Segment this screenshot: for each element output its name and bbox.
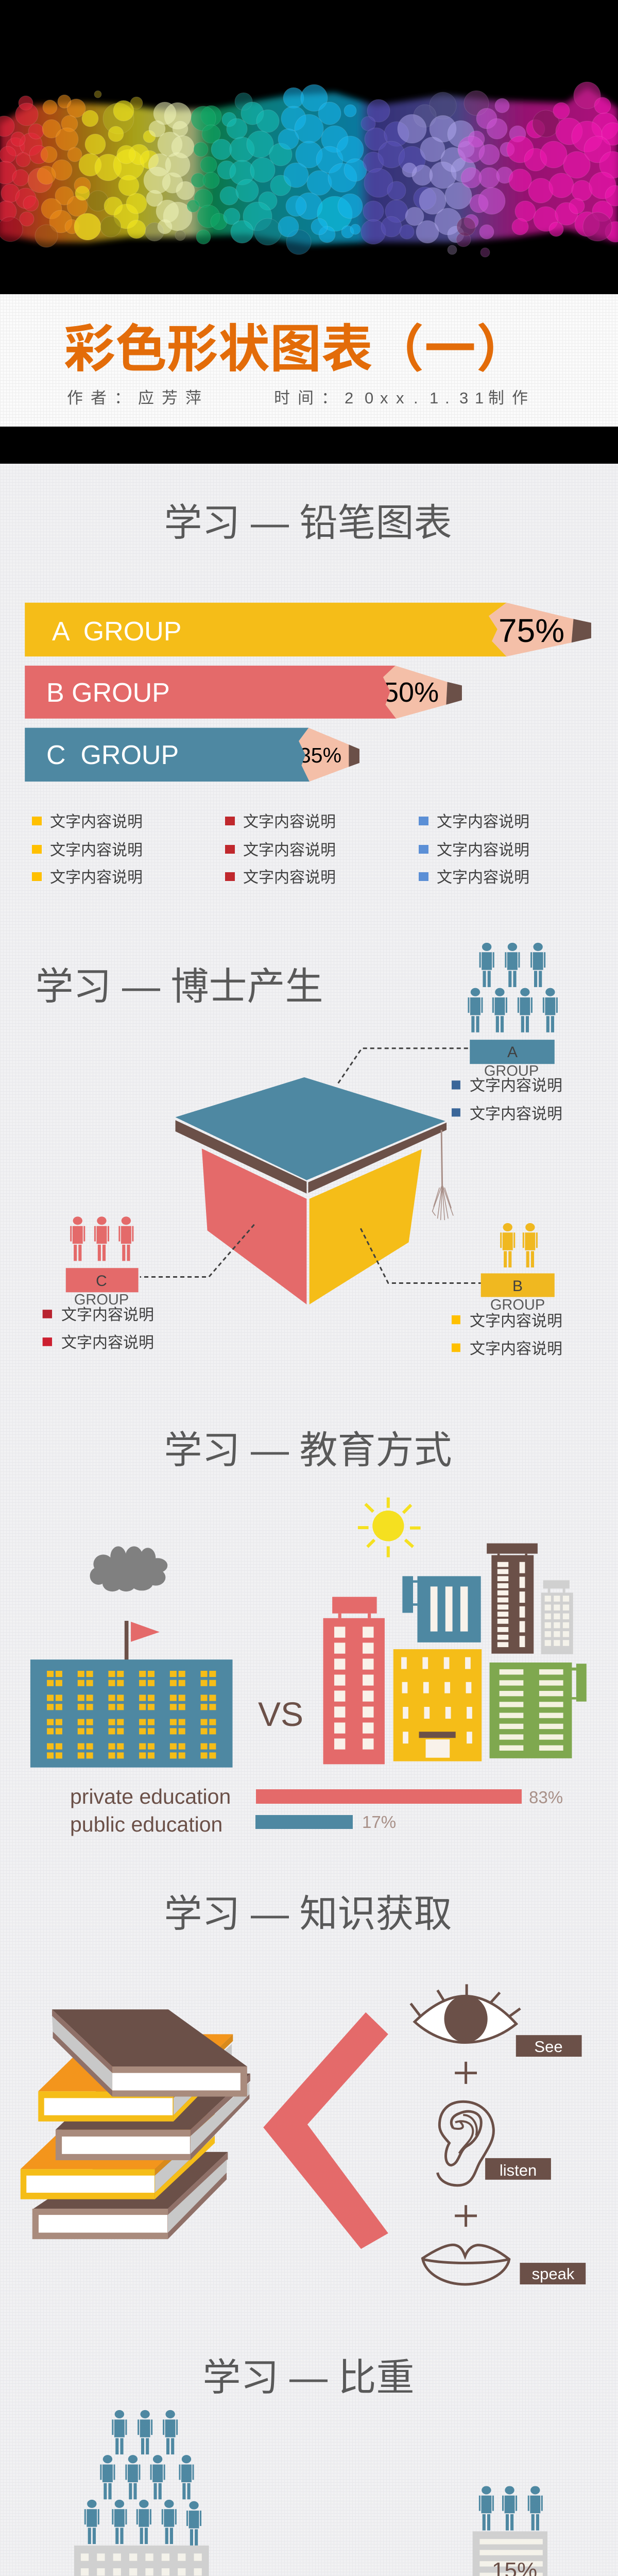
group C: 文字内容说明 — [61, 1307, 154, 1324]
panel: proportion scale — [68, 2356, 586, 2576]
graduation cap cube — [176, 1077, 453, 1304]
group B: 文字内容说明 — [470, 1313, 562, 1330]
icon: book stack — [21, 2009, 250, 2239]
heading: doctor production: 学习 — 博士产生 — [35, 965, 323, 1008]
group A: GROUP — [484, 1063, 539, 1079]
author and date line: 时间：20xx.1.31制作 — [274, 389, 528, 407]
right side 15% building and people — [473, 2486, 547, 2576]
group B — [452, 1223, 562, 1358]
pencil C 35%: 35% — [299, 743, 341, 767]
bar chart: private vs public — [70, 1785, 563, 1836]
dashed connectors — [140, 1048, 481, 1283]
bar chart: private vs public: private education — [70, 1785, 231, 1808]
legend: 文字内容说明 — [50, 842, 143, 859]
legend: 文字内容说明 — [243, 869, 336, 886]
legend: 文字内容说明 — [437, 814, 529, 831]
author and date line — [67, 389, 528, 407]
grey tower — [541, 1580, 573, 1654]
legend: 文字内容说明 — [243, 842, 336, 859]
pencil B 50%: 50% — [383, 677, 439, 708]
group C — [43, 1216, 154, 1351]
legend: 文字内容说明 — [243, 814, 336, 831]
red tower — [323, 1597, 385, 1764]
author and date line: 作者：应芳萍 — [67, 389, 201, 407]
pencil C 35% — [25, 728, 359, 782]
pencil B 50%: B GROUP — [46, 678, 170, 708]
legend: 文字内容说明 — [437, 842, 529, 859]
panel: doctor cap — [35, 943, 562, 1358]
group A: 文字内容说明 — [470, 1077, 562, 1094]
private school buildings — [323, 1544, 587, 1764]
book 1 — [52, 2009, 247, 2097]
pencil A 75% — [25, 603, 591, 656]
brown tower — [487, 1544, 538, 1654]
book 2 — [38, 2034, 233, 2122]
bar chart: private vs public: public education — [70, 1812, 222, 1836]
plus sign — [455, 2062, 477, 2084]
book 3 — [56, 2074, 250, 2160]
legend — [32, 814, 529, 886]
bar chart: private vs public: 83% — [529, 1788, 563, 1807]
public school building with flag — [30, 1621, 233, 1768]
panel: pencil chart — [25, 501, 591, 886]
group B: GROUP — [490, 1297, 545, 1313]
title: 彩色形状图表（一） — [64, 320, 527, 378]
icon: mouth with speak label: speak — [532, 2265, 575, 2283]
heading: education method: 学习 — 教育方式 — [164, 1429, 452, 1471]
VS label: VS — [258, 1695, 303, 1733]
top banner: rainbow bubbles — [0, 82, 618, 257]
icon: ear with listen label — [437, 2102, 551, 2185]
group C: GROUP — [74, 1292, 129, 1308]
heading: pencil chart: 学习 — 铅笔图表 — [164, 501, 452, 544]
yellow building — [393, 1649, 482, 1761]
left side 85% building and people — [74, 2410, 209, 2576]
group B: 文字内容说明 — [470, 1341, 562, 1358]
book 5 — [32, 2152, 228, 2239]
arrow: red chevron — [263, 2012, 388, 2249]
plus sign — [455, 2205, 477, 2227]
group A — [452, 943, 562, 1123]
group B: B — [512, 1278, 523, 1295]
icon: mouth with speak label — [422, 2245, 586, 2284]
icon: sun — [358, 1498, 421, 1557]
pencil C 35%: C GROUP — [46, 740, 179, 770]
panel: knowledge acquisition — [21, 1892, 586, 2284]
icon: rain cloud — [90, 1546, 167, 1591]
legend: 文字内容说明 — [50, 869, 143, 886]
book 4 — [21, 2113, 215, 2199]
heading: knowledge acquisition: 学习 — 知识获取 — [164, 1892, 452, 1935]
pencil A 75%: A GROUP — [52, 617, 181, 647]
group C: C — [96, 1273, 107, 1290]
panel: title band — [0, 294, 618, 427]
pencil A 75%: 75% — [499, 612, 564, 649]
icon: eye with See label: See — [534, 2038, 563, 2056]
icon: eye with See label — [410, 1984, 582, 2057]
legend: 文字内容说明 — [437, 869, 529, 886]
heading: proportion: 学习 — 比重 — [202, 2356, 415, 2399]
group C: 文字内容说明 — [61, 1334, 154, 1351]
teal building — [402, 1576, 481, 1642]
pencil B 50% — [25, 666, 462, 719]
group A: A — [507, 1044, 518, 1061]
icon: ear with listen label: listen — [500, 2161, 537, 2179]
green building — [490, 1663, 587, 1758]
legend: 文字内容说明 — [50, 814, 143, 831]
panel: education method — [30, 1429, 587, 1836]
group A: 文字内容说明 — [470, 1106, 562, 1123]
bar chart: private vs public: 17% — [362, 1812, 396, 1832]
